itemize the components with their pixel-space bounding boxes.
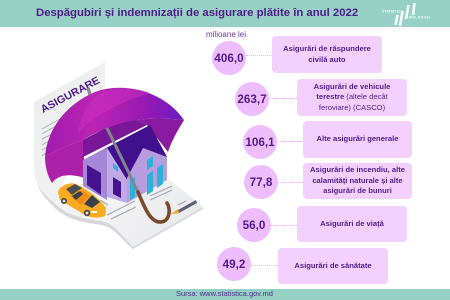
value: 106,1 [245, 136, 275, 148]
umbrella shaft and handle [107, 128, 169, 222]
paper [34, 62, 203, 249]
house [83, 125, 167, 203]
label [278, 248, 388, 284]
label [303, 163, 412, 199]
row 5 [237, 206, 407, 242]
connector [251, 265, 278, 266]
row 4 [244, 163, 412, 199]
value [212, 41, 246, 75]
label [272, 36, 382, 73]
pen [171, 200, 197, 214]
logo: MOLDOVEI [409, 16, 430, 20]
connector [276, 141, 303, 142]
connector [246, 55, 272, 56]
label [297, 206, 407, 242]
label: Asigurări de răspundere [283, 44, 371, 53]
value [243, 125, 277, 159]
label: Alte asigurări generale [317, 134, 398, 143]
logo [382, 2, 430, 26]
unit label: milioane lei [206, 30, 246, 39]
label [303, 121, 412, 158]
connector [271, 225, 297, 226]
label [297, 79, 407, 116]
footer bar [0, 289, 450, 300]
paper text lines [42, 119, 60, 156]
label: terestre (altele decât [316, 92, 388, 101]
connector [277, 182, 303, 183]
heading on paper: ASIGURARE [39, 75, 102, 116]
row 2 [235, 79, 407, 116]
row 6 [217, 247, 388, 284]
value: 49,2 [223, 258, 245, 270]
connector [268, 98, 297, 99]
logo: STATISTICA [382, 10, 404, 14]
label: feroviare) (CASCO) [319, 103, 385, 112]
label: Asigurări de vehicule [314, 82, 390, 91]
label: Asigurări de incendiu, alte [310, 165, 405, 174]
title: Despăgubiri și indemnizații de asigurare plătite în anul 2022 [36, 7, 358, 19]
label: civilă auto [308, 54, 346, 64]
car [58, 183, 106, 218]
value: 56,0 [243, 218, 265, 232]
value [244, 165, 278, 199]
value: 263,7 [237, 92, 267, 106]
value: 406,0 [214, 52, 244, 64]
row 3 [243, 121, 412, 159]
umbrella [45, 88, 184, 183]
illustration: insurance policy, umbrella, house, car [34, 62, 203, 249]
label: Asigurări de viață [320, 219, 384, 228]
header bar [0, 0, 450, 27]
source: Sursa: www.statistica.gov.md [176, 289, 273, 298]
label: calamități naturale și alte [312, 176, 403, 185]
value [235, 82, 269, 116]
row 1 [212, 36, 382, 75]
label: asigurări de bunuri [323, 186, 392, 195]
value [237, 208, 271, 242]
value: 77,8 [250, 176, 272, 188]
value [217, 247, 251, 281]
label: Asigurări de sănătate [294, 261, 372, 270]
